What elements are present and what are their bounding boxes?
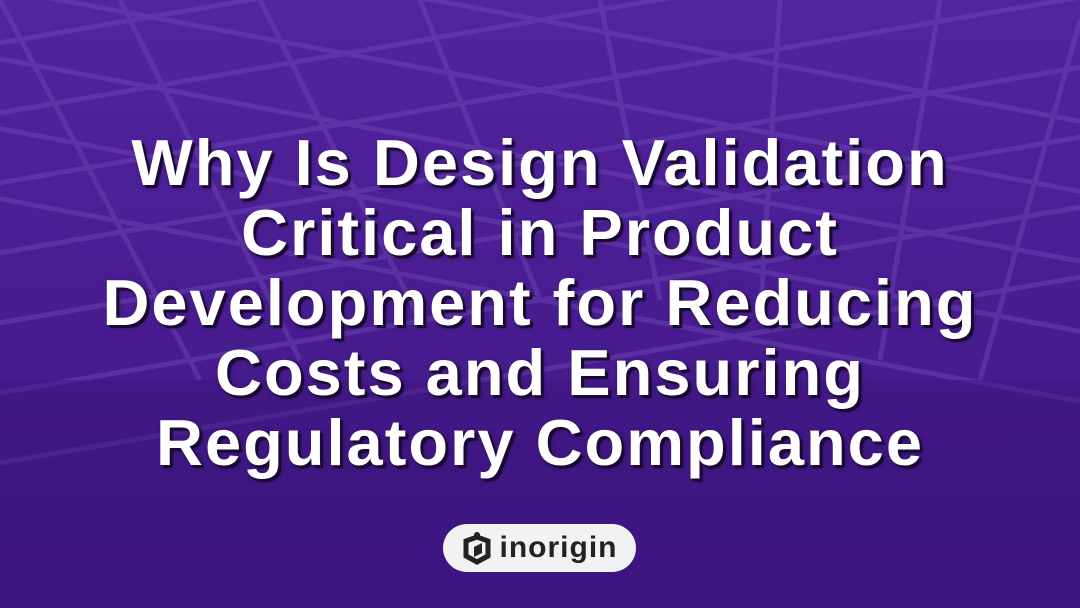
title [102, 126, 978, 484]
title: Why Is Design Validation [131, 126, 949, 199]
title: Regulatory Compliance [156, 406, 924, 479]
icon: logo mark [464, 532, 490, 565]
title: Development for Reducing [102, 266, 978, 339]
brand name: inorigin [500, 531, 617, 564]
title: Costs and Ensuring [215, 336, 865, 409]
logo pill [443, 524, 636, 572]
title: Critical in Product [241, 196, 839, 269]
